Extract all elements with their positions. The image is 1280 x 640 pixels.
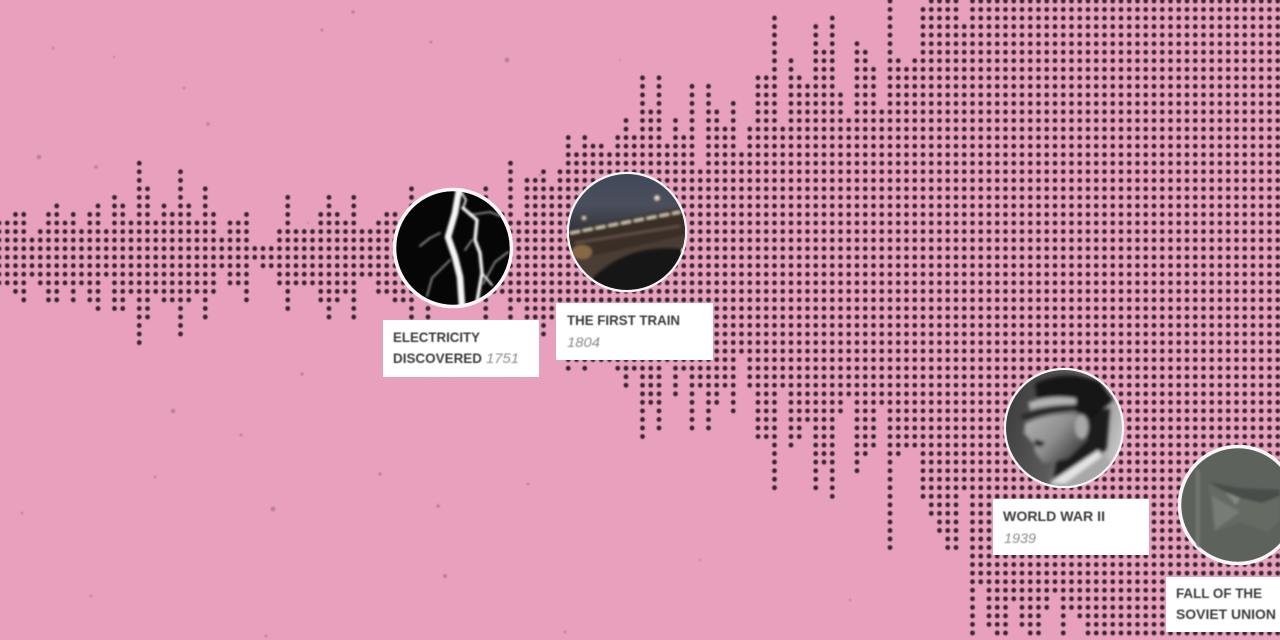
card: the first train [556,303,713,360]
icon: lightning photo circle [394,190,512,306]
card: world war ii: 1939 [1004,531,1037,546]
icon: portrait photo circle [1004,368,1124,488]
card: fall of the soviet union: FALL OF THE [1176,585,1262,601]
card: electricity discovered: 1751 [486,351,519,366]
card: world war ii [993,499,1149,555]
card: the first train: 1804 [567,335,600,350]
card: fall of the soviet union [1166,577,1280,632]
icon: flag photo circle [1180,446,1280,564]
card: fall of the soviet union: SOVIET UNION [1176,606,1276,622]
card: electricity discovered [383,320,539,377]
card: world war ii: WORLD WAR II [1003,508,1105,524]
card: the first train: THE FIRST TRAIN [567,312,680,328]
icon: train bridge photo circle [565,170,690,295]
card: electricity discovered: DISCOVERED [393,350,482,366]
background specks [21,10,851,637]
card: electricity discovered: ELECTRICITY [393,329,481,345]
